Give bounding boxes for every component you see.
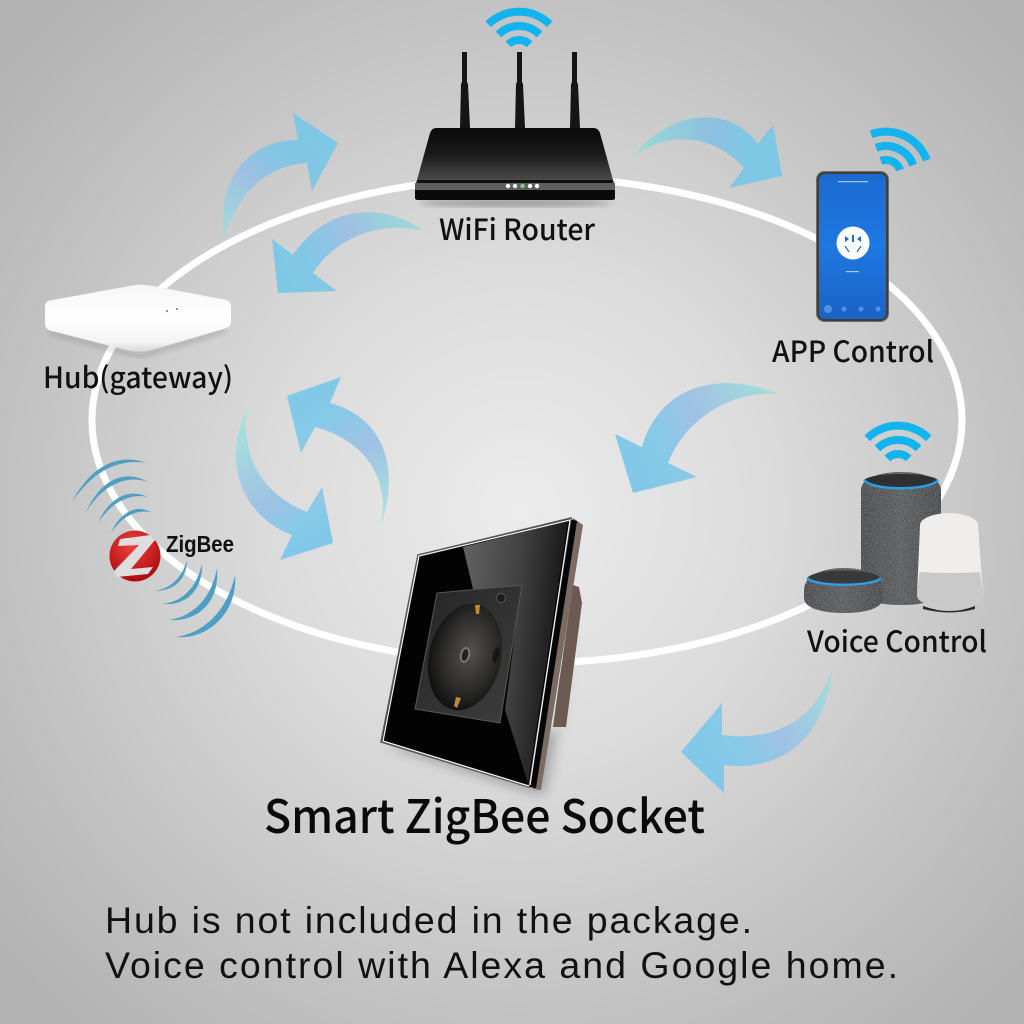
smart socket: [381, 518, 583, 794]
socket glass plate: [381, 518, 571, 787]
icon: speakers wifi signal: [867, 426, 929, 458]
socket earth contacts: [475, 605, 480, 614]
socket pin holes: [458, 646, 472, 664]
WiFi router: [415, 12, 615, 207]
socket back box: [553, 585, 582, 727]
google home speaker: [917, 513, 983, 612]
glass reflection: [463, 521, 568, 783]
white connection ellipse: [92, 177, 962, 663]
arrow: gateway to router: [223, 113, 338, 238]
tall speaker: [861, 472, 941, 605]
arrow: voice to socket: [681, 670, 832, 793]
socket shadow: [386, 640, 575, 794]
label: WiFi Router: WiFi Router: [439, 207, 595, 249]
router LEDs: [506, 184, 539, 188]
zigbee wordmark: ZigBee: [166, 531, 234, 557]
socket side edge: [533, 518, 583, 790]
label: APP Control: APP Control: [772, 329, 934, 371]
small dot speaker: [804, 568, 883, 613]
zigbee waves: [72, 459, 235, 637]
note line two: Voice control with Alexa and Google home.: [105, 944, 898, 986]
zigbee badge: [110, 530, 160, 582]
note line one: Hub is not included in the package.: [105, 899, 752, 941]
phone screen: [819, 174, 886, 319]
hub gateway: [45, 285, 231, 356]
ZigBee logo and signal waves: [72, 459, 235, 637]
arrow: router to gateway: [272, 212, 423, 293]
plate edge highlight: [383, 520, 570, 786]
socket round recess: [418, 596, 512, 718]
smart speakers: [804, 426, 983, 613]
title: Smart ZigBee Socket: Smart ZigBee Socket: [264, 781, 705, 847]
icon: router wifi signal: [488, 12, 550, 44]
socket square insert: [415, 585, 522, 723]
arrow: gateway to socket: [236, 408, 333, 560]
router body: [417, 128, 613, 180]
arrow: app to socket: [615, 383, 778, 493]
phone body: [816, 172, 888, 322]
label: Voice Control: Voice Control: [806, 619, 987, 661]
note text block: [105, 899, 898, 986]
smartphone with app: [816, 123, 932, 321]
router antennas: [460, 52, 580, 128]
arrow: socket to gateway: [287, 377, 389, 527]
arrow: router to app: [635, 117, 782, 188]
label: Hub(gateway): Hub(gateway): [43, 355, 233, 397]
icon: phone wifi signal: [863, 123, 932, 178]
socket black edge strip: [529, 519, 577, 788]
app socket icon: [836, 226, 870, 260]
